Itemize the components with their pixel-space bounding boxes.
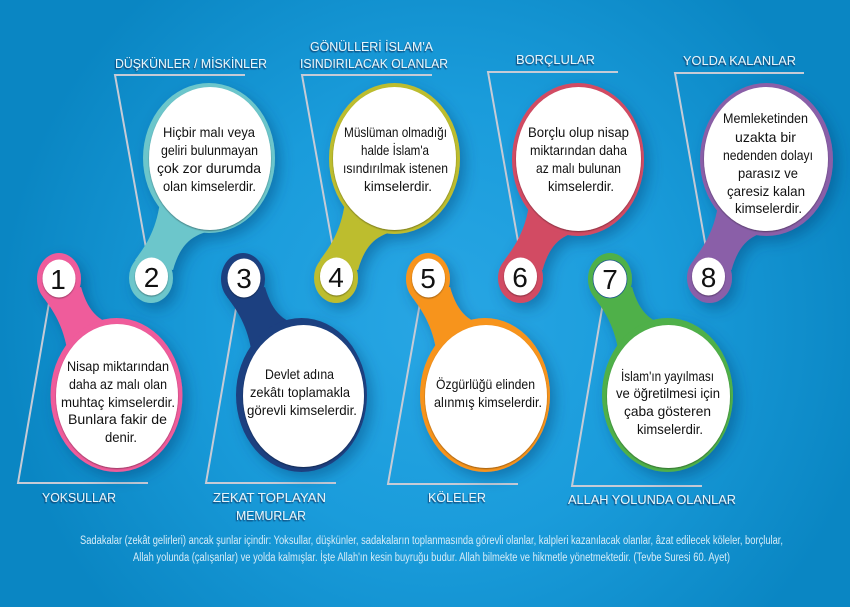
pin 6: Borçlular (498, 83, 644, 303)
description 8: parasız ve (738, 165, 798, 181)
description 7: İslam'ın yayılması (621, 367, 714, 384)
leader line: pin 7 (572, 303, 702, 486)
description 2: Hiçbir malı veya (163, 124, 255, 140)
description 8: kimselerdir. (735, 200, 802, 216)
number 4: 4 (328, 262, 344, 293)
description 8: uzakta bir (735, 129, 796, 145)
description 1: denir. (105, 429, 137, 445)
description 2: çok zor durumda (157, 160, 261, 176)
description 4: ısındırılmak istenen (343, 160, 448, 176)
description 4: halde İslam'a (361, 141, 429, 158)
description 3: görevli kimselerdir. (247, 402, 357, 418)
description 7: kimselerdir. (637, 421, 703, 437)
label: Zekat toplayan memurlar: ZEKAT TOPLAYAN (213, 490, 326, 505)
description 5: alınmış kimselerdir. (434, 394, 542, 410)
pin 7: Allah yolunda olanlar (588, 253, 733, 472)
description 6: Borçlu olup nisap (528, 124, 629, 140)
number 3: 3 (236, 263, 252, 294)
description 3 (247, 366, 357, 418)
number 8: 8 (701, 262, 716, 293)
description 2: olan kimselerdir. (163, 178, 256, 194)
description 8 (723, 110, 813, 216)
description 1 (61, 358, 175, 445)
footer verse text (80, 535, 783, 564)
description 6: miktarından daha (530, 142, 627, 158)
description 3: Devlet adına (265, 366, 334, 382)
pin 2: Düşkünler (129, 83, 275, 303)
pin 1: Yoksullar (37, 253, 182, 472)
number 6: 6 (512, 262, 528, 293)
label: Düşkünler / Miskinler: DÜŞKÜNLER / MİSKİNLER (115, 56, 267, 71)
number 1: 1 (50, 264, 66, 295)
description 8: Memleketinden (723, 110, 808, 126)
label: Borçlular: BORÇLULAR (516, 52, 595, 67)
label: Köleler: KÖLELER (428, 490, 486, 505)
number 7: 7 (602, 264, 618, 295)
label: Yoksullar: YOKSULLAR (42, 490, 116, 505)
description 2: geliri bulunmayan (161, 142, 258, 158)
description 6: kimselerdir. (548, 178, 614, 194)
description 4: kimselerdir. (364, 178, 432, 194)
pin 5: Köleler (406, 253, 550, 472)
leader line: pin 3 (206, 303, 336, 483)
description 8: nedenden dolayı (723, 147, 813, 163)
leader line: pin 2 (115, 75, 245, 248)
label: Gönülleri İslam'a ısındırılacak olanlar: GÖNÜLLERİ İSLAM'A (310, 39, 433, 54)
pin 8: Yolda kalanlar (687, 83, 833, 303)
leader line: pin 4 (302, 75, 432, 248)
number 2: 2 (144, 262, 159, 293)
description 1: muhtaç kimselerdir. (61, 394, 175, 410)
pin 3: Zekat toplayan memurlar (221, 253, 367, 472)
label: Allah yolunda olanlar: ALLAH YOLUNDA OLANLAR (568, 492, 736, 507)
description 4: Müslüman olmadığı (344, 124, 447, 140)
label: Gönülleri İslam'a ısındırılacak olanlar: ISINDIRILACAK OLANLAR (300, 56, 448, 71)
description 4 (343, 124, 448, 194)
description 1: Bunlara fakir de (68, 411, 167, 427)
leader line: pin 8 (675, 73, 804, 248)
label: Gönülleri İslam'a ısındırılacak olanlar (300, 39, 448, 71)
description 1: Nisap miktarından (67, 358, 169, 374)
description 7: çaba gösteren (624, 403, 711, 419)
label: Zekat toplayan memurlar (213, 490, 326, 523)
pin 4: Gönülleri İslam'a ısındırılacak olanlar (314, 83, 460, 303)
description 5 (434, 375, 542, 410)
description 5: Özgürlüğü elinden (436, 375, 535, 392)
description 7: ve öğretilmesi için (616, 385, 720, 401)
description 1: daha az malı olan (69, 376, 167, 392)
description 6: az malı bulunan (536, 160, 621, 176)
label: Yolda kalanlar: YOLDA KALANLAR (683, 53, 796, 68)
description 2 (157, 124, 261, 194)
leader line: pin 6 (488, 72, 618, 247)
description 6 (528, 124, 629, 194)
description 8: çaresiz kalan (727, 183, 805, 199)
leader line: pin 5 (388, 303, 518, 484)
footer verse text: Allah yolunda (çalışanlar) ve yolda kalmışlar. İşte Allah'ın kesin buyruğu budur. Allah bilmekte ve hikmetle yönetmektedir. (Tevbe Suresi 60. Ayet) (133, 551, 730, 564)
number 5: 5 (420, 263, 436, 294)
leader line: pin 1 (18, 303, 148, 483)
description 3: zekâtı toplamakla (250, 384, 350, 400)
description 7 (616, 367, 720, 437)
label: Zekat toplayan memurlar: MEMURLAR (236, 508, 306, 523)
